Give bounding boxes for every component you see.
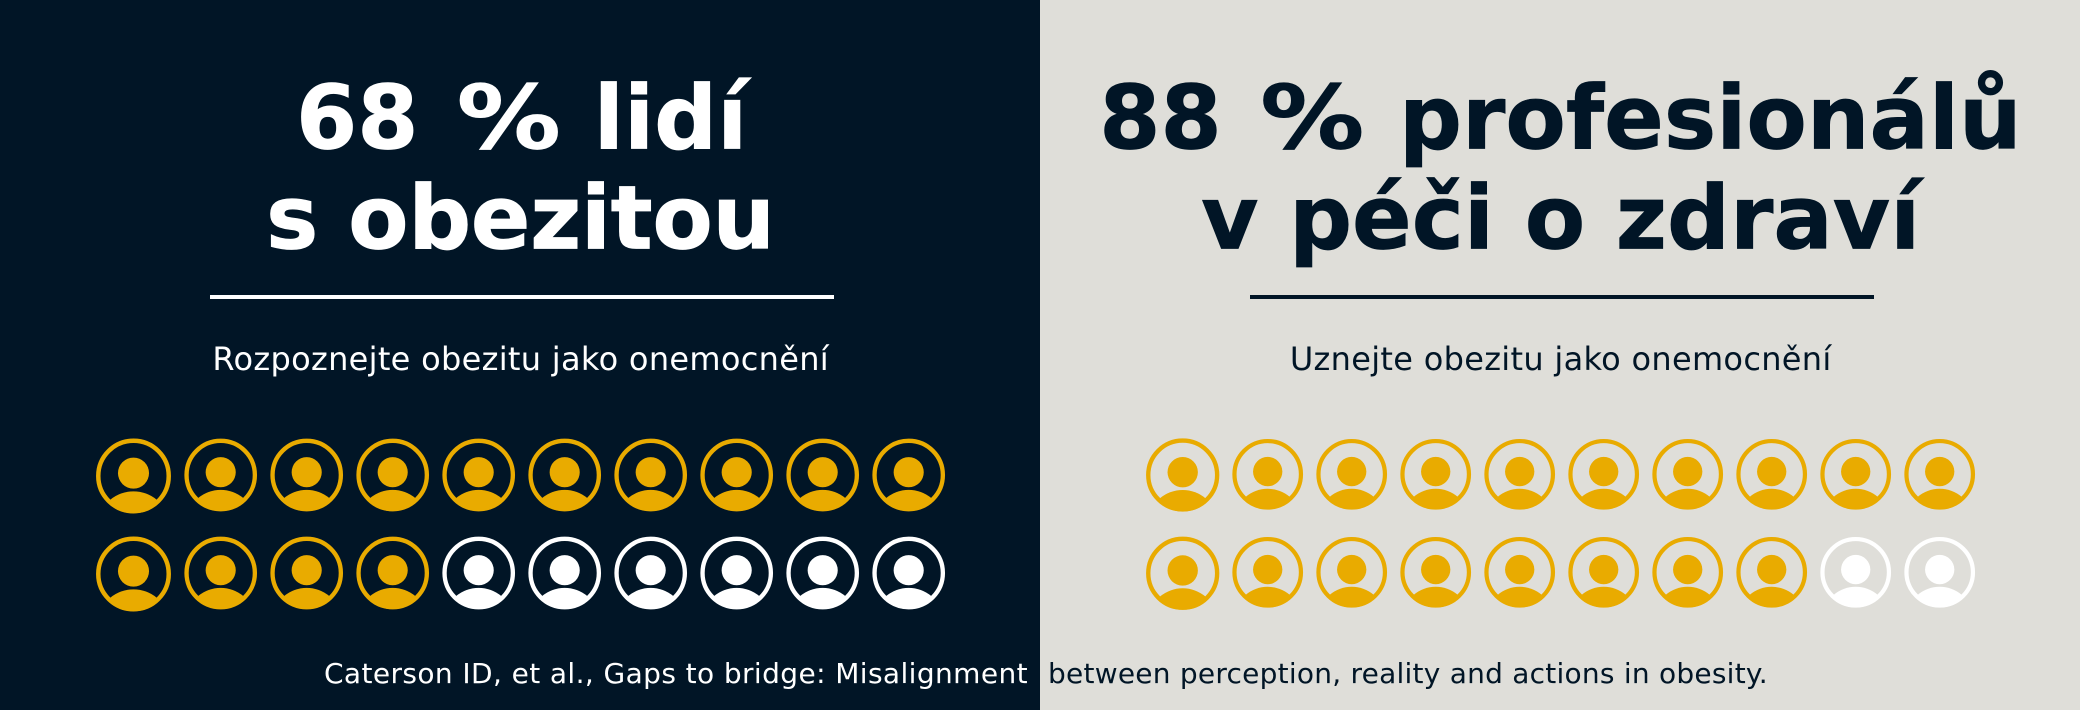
icon: person gold	[1234, 539, 1301, 607]
subheading: right: Uznejte obezitu jako onemocnění	[1290, 340, 1832, 378]
icon: person gold	[1402, 441, 1469, 509]
icon: person gold	[1486, 539, 1553, 607]
icon: person gold	[273, 441, 341, 511]
icon: person white	[703, 539, 771, 609]
divider: left	[210, 295, 834, 299]
icon: person white	[1822, 539, 1889, 607]
icon: person gold	[1822, 441, 1889, 509]
heading: 68 % of people with obesity: s obezitou	[266, 166, 775, 269]
divider: right	[1250, 295, 1874, 299]
icon: person gold	[1570, 441, 1637, 509]
heading: 88 % of healthcare professionals: profesionálů	[1399, 66, 2022, 169]
icon: person gold	[1906, 441, 1973, 509]
icon: person gold	[531, 441, 599, 511]
panel: right light background	[1040, 0, 2080, 710]
heading: 88 % of healthcare professionals	[1099, 66, 2022, 269]
heading: 88 % of healthcare professionals: v péči o zdraví	[1201, 166, 1925, 269]
icon: person white	[445, 539, 513, 609]
icon: person gold	[1234, 441, 1301, 509]
icon: person gold	[1570, 539, 1637, 607]
heading: 68 % of people with obesity: lidí	[594, 66, 752, 169]
icon: person gold	[187, 441, 255, 511]
icon: person gold	[703, 441, 771, 511]
subheading: left: Rozpoznejte obezitu jako onemocnění	[212, 340, 830, 378]
heading: 68 % of people with obesity	[266, 66, 775, 269]
icon: person white	[617, 539, 685, 609]
icon: person gold	[98, 441, 169, 513]
icon: person white	[789, 539, 857, 609]
icon: person gold	[359, 441, 427, 511]
icon: person gold	[789, 441, 857, 511]
icon: person gold	[1402, 539, 1469, 607]
icon: person gold	[273, 539, 341, 609]
heading: 68 % of people with obesity: 68	[296, 66, 418, 169]
heading: 68 % of people with obesity: %	[457, 67, 561, 169]
citation: right part: between perception, reality and actions in obesity.	[1048, 657, 1768, 690]
icon: person gold	[1654, 441, 1721, 509]
icon: person white	[531, 539, 599, 609]
icon: person gold	[1318, 441, 1385, 509]
heading: 88 % of healthcare professionals: 88	[1099, 66, 1222, 169]
icon: person gold	[1738, 539, 1805, 607]
icon: person gold	[617, 441, 685, 511]
icon: person white	[875, 539, 943, 609]
icon: person gold	[1738, 441, 1805, 509]
icon: person white	[1906, 539, 1973, 607]
icon: person gold	[1148, 539, 1217, 610]
icon: person gold	[1148, 441, 1217, 511]
panel: left dark background	[0, 0, 1040, 710]
icon grid: left, 14 of 20 highlighted	[98, 441, 943, 611]
icon grid: right, 18 of 20 highlighted	[1148, 441, 1973, 610]
icon: person gold	[1654, 539, 1721, 607]
icon: person gold	[875, 441, 943, 511]
icon: person gold	[187, 539, 255, 609]
icon: person gold	[1486, 441, 1553, 509]
citation: left part: Caterson ID, et al., Gaps to bridge: Misalignment	[324, 657, 1028, 690]
icon: person gold	[359, 539, 427, 609]
icon: person gold	[445, 441, 513, 511]
icon: person gold	[1318, 539, 1385, 607]
heading: 88 % of healthcare professionals: %	[1260, 67, 1364, 169]
icon: person gold	[98, 539, 169, 611]
